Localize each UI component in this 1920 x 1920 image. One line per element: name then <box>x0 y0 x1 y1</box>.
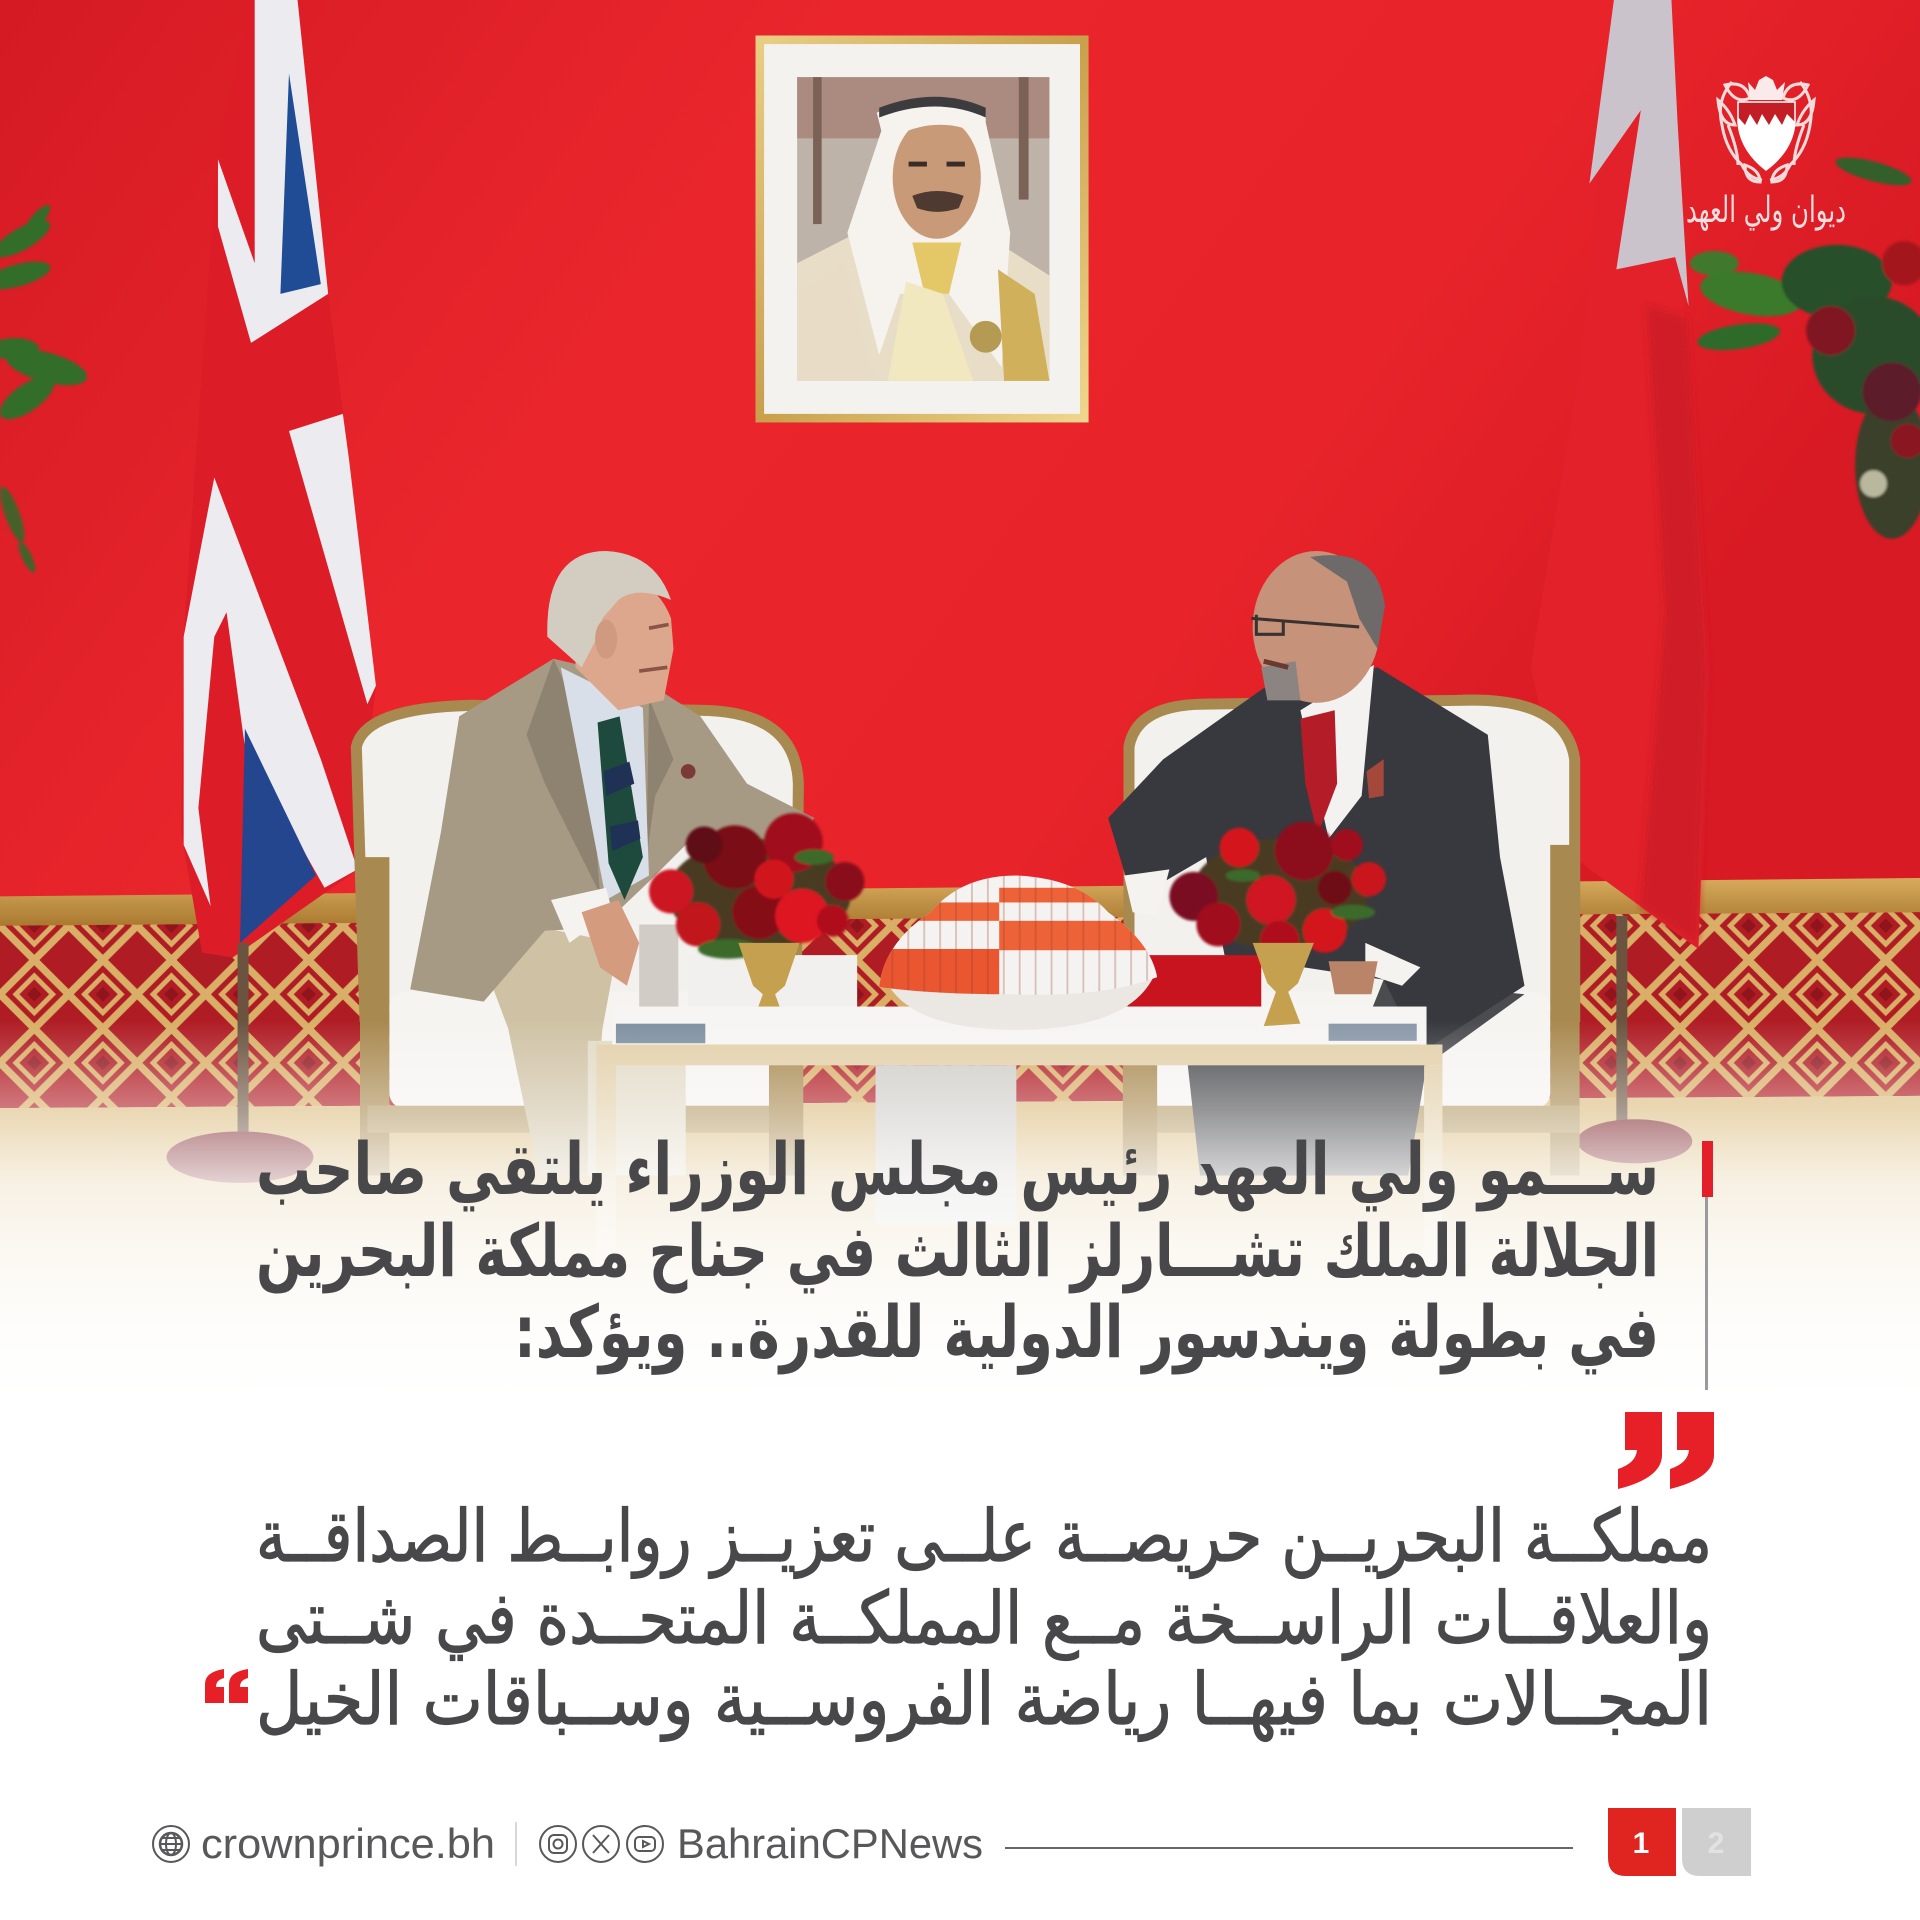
man on right <box>1108 551 1525 1176</box>
right white band <box>289 414 376 704</box>
right greenery with flowers <box>1690 152 1920 539</box>
booklets <box>616 1024 705 1043</box>
bowl base <box>887 977 1153 1030</box>
red tie <box>1300 710 1337 835</box>
closing quotation mark <box>1618 1412 1714 1489</box>
upper white cross band <box>218 0 328 343</box>
right armchair <box>1123 700 1580 1176</box>
opening quotation mark <box>205 1669 248 1703</box>
ear <box>595 620 617 659</box>
left greenery <box>0 201 91 575</box>
mouth and eye <box>639 624 669 671</box>
gold frame <box>756 36 1089 422</box>
beard <box>1261 661 1300 700</box>
white mat <box>764 44 1080 414</box>
quote line 3: المجــالات بما فيهــا رياضة الفروســية وســباقات الخيل <box>256 1657 1712 1742</box>
right gold vase <box>1253 943 1314 1026</box>
striped tie <box>598 716 643 900</box>
lapel shading <box>527 659 600 894</box>
right cuff <box>1365 943 1420 986</box>
patterned lower wall <box>0 912 1920 1108</box>
glasses <box>1251 615 1359 634</box>
grey line <box>1705 1190 1708 1390</box>
shield white field <box>1738 114 1795 170</box>
heading text <box>256 1127 1659 1375</box>
trousers <box>1188 980 1525 1176</box>
heading accent rule <box>1702 1141 1713 1390</box>
sanitizer bottle <box>639 924 678 1008</box>
footer <box>153 1808 1751 1876</box>
shirt <box>1300 665 1374 839</box>
white box under left flowers <box>688 955 857 1041</box>
icon: youtube <box>627 1826 663 1862</box>
left gold vase <box>738 943 800 1031</box>
calligraphy: ديوان ولي العهد <box>1686 190 1846 231</box>
wreath <box>1718 82 1814 182</box>
page tab 1: 1 <box>1633 1827 1649 1860</box>
page tab 2 <box>1682 1808 1751 1876</box>
pocket flower <box>681 764 696 779</box>
crown prince court logo <box>1686 76 1846 231</box>
lower blue canton <box>240 729 316 943</box>
portrait photo <box>797 77 1049 381</box>
red wall <box>0 0 1920 931</box>
red bar <box>1702 1141 1713 1197</box>
quote line 2: والعلاقــات الراســخة مــع المملكــة المتحــدة في شــتى <box>256 1576 1712 1661</box>
pole base <box>1577 1119 1692 1163</box>
separator <box>515 1822 517 1866</box>
page tab 1 <box>1608 1808 1676 1876</box>
union flag <box>167 0 376 1183</box>
white lower panel <box>0 1399 1920 1920</box>
background photo scene <box>0 0 1920 1420</box>
tabletop <box>612 1007 1427 1048</box>
right flower arrangement <box>1169 822 1386 960</box>
icon: globe <box>153 1826 189 1862</box>
medal <box>1367 759 1384 798</box>
flag pole <box>238 943 249 1151</box>
table <box>596 1007 1442 1273</box>
head <box>1253 551 1380 703</box>
hand <box>582 900 639 986</box>
shield <box>1738 102 1795 170</box>
cuff <box>551 888 612 943</box>
left armchair <box>356 705 803 1176</box>
pole base <box>167 1131 313 1183</box>
lower left white band <box>184 478 358 906</box>
flag base red <box>181 0 376 958</box>
red field <box>1531 0 1708 949</box>
upper blue canton <box>280 73 321 294</box>
jacket <box>410 659 814 1002</box>
framed portrait <box>756 36 1089 422</box>
page tab 2: 2 <box>1708 1827 1724 1860</box>
lower panel <box>876 1065 1016 1224</box>
trousers <box>490 928 618 1176</box>
white fade over photo <box>0 1020 1920 1400</box>
man on left <box>410 551 814 1176</box>
bahrain flag <box>1531 0 1708 1163</box>
quote text <box>256 1494 1712 1742</box>
mouth <box>1264 661 1288 667</box>
shirt <box>561 667 649 900</box>
sweet bowl <box>879 876 1158 1030</box>
jacket <box>1108 667 1525 1053</box>
icon: x <box>583 1826 619 1862</box>
flag fold shading <box>1641 306 1707 943</box>
icon: instagram <box>540 1826 576 1862</box>
legs <box>596 1065 616 1273</box>
flag pole <box>1616 916 1627 1130</box>
crown <box>1748 76 1785 100</box>
hair <box>547 551 671 667</box>
tray of red cloth <box>1127 955 1261 1010</box>
white hoist <box>1589 0 1689 306</box>
left cuff <box>1124 869 1169 916</box>
website text: crownprince.bh <box>201 1820 495 1867</box>
left flower arrangement <box>649 813 864 959</box>
floor strip <box>0 1096 1920 1420</box>
hand <box>1329 961 1378 994</box>
dome bands <box>879 876 1158 995</box>
table edge <box>596 1044 1442 1065</box>
gold wall band <box>0 878 1920 926</box>
face <box>576 576 673 710</box>
social handle: BahrainCPNews <box>677 1820 983 1867</box>
footer rule <box>1005 1847 1573 1849</box>
hair <box>1310 555 1385 649</box>
